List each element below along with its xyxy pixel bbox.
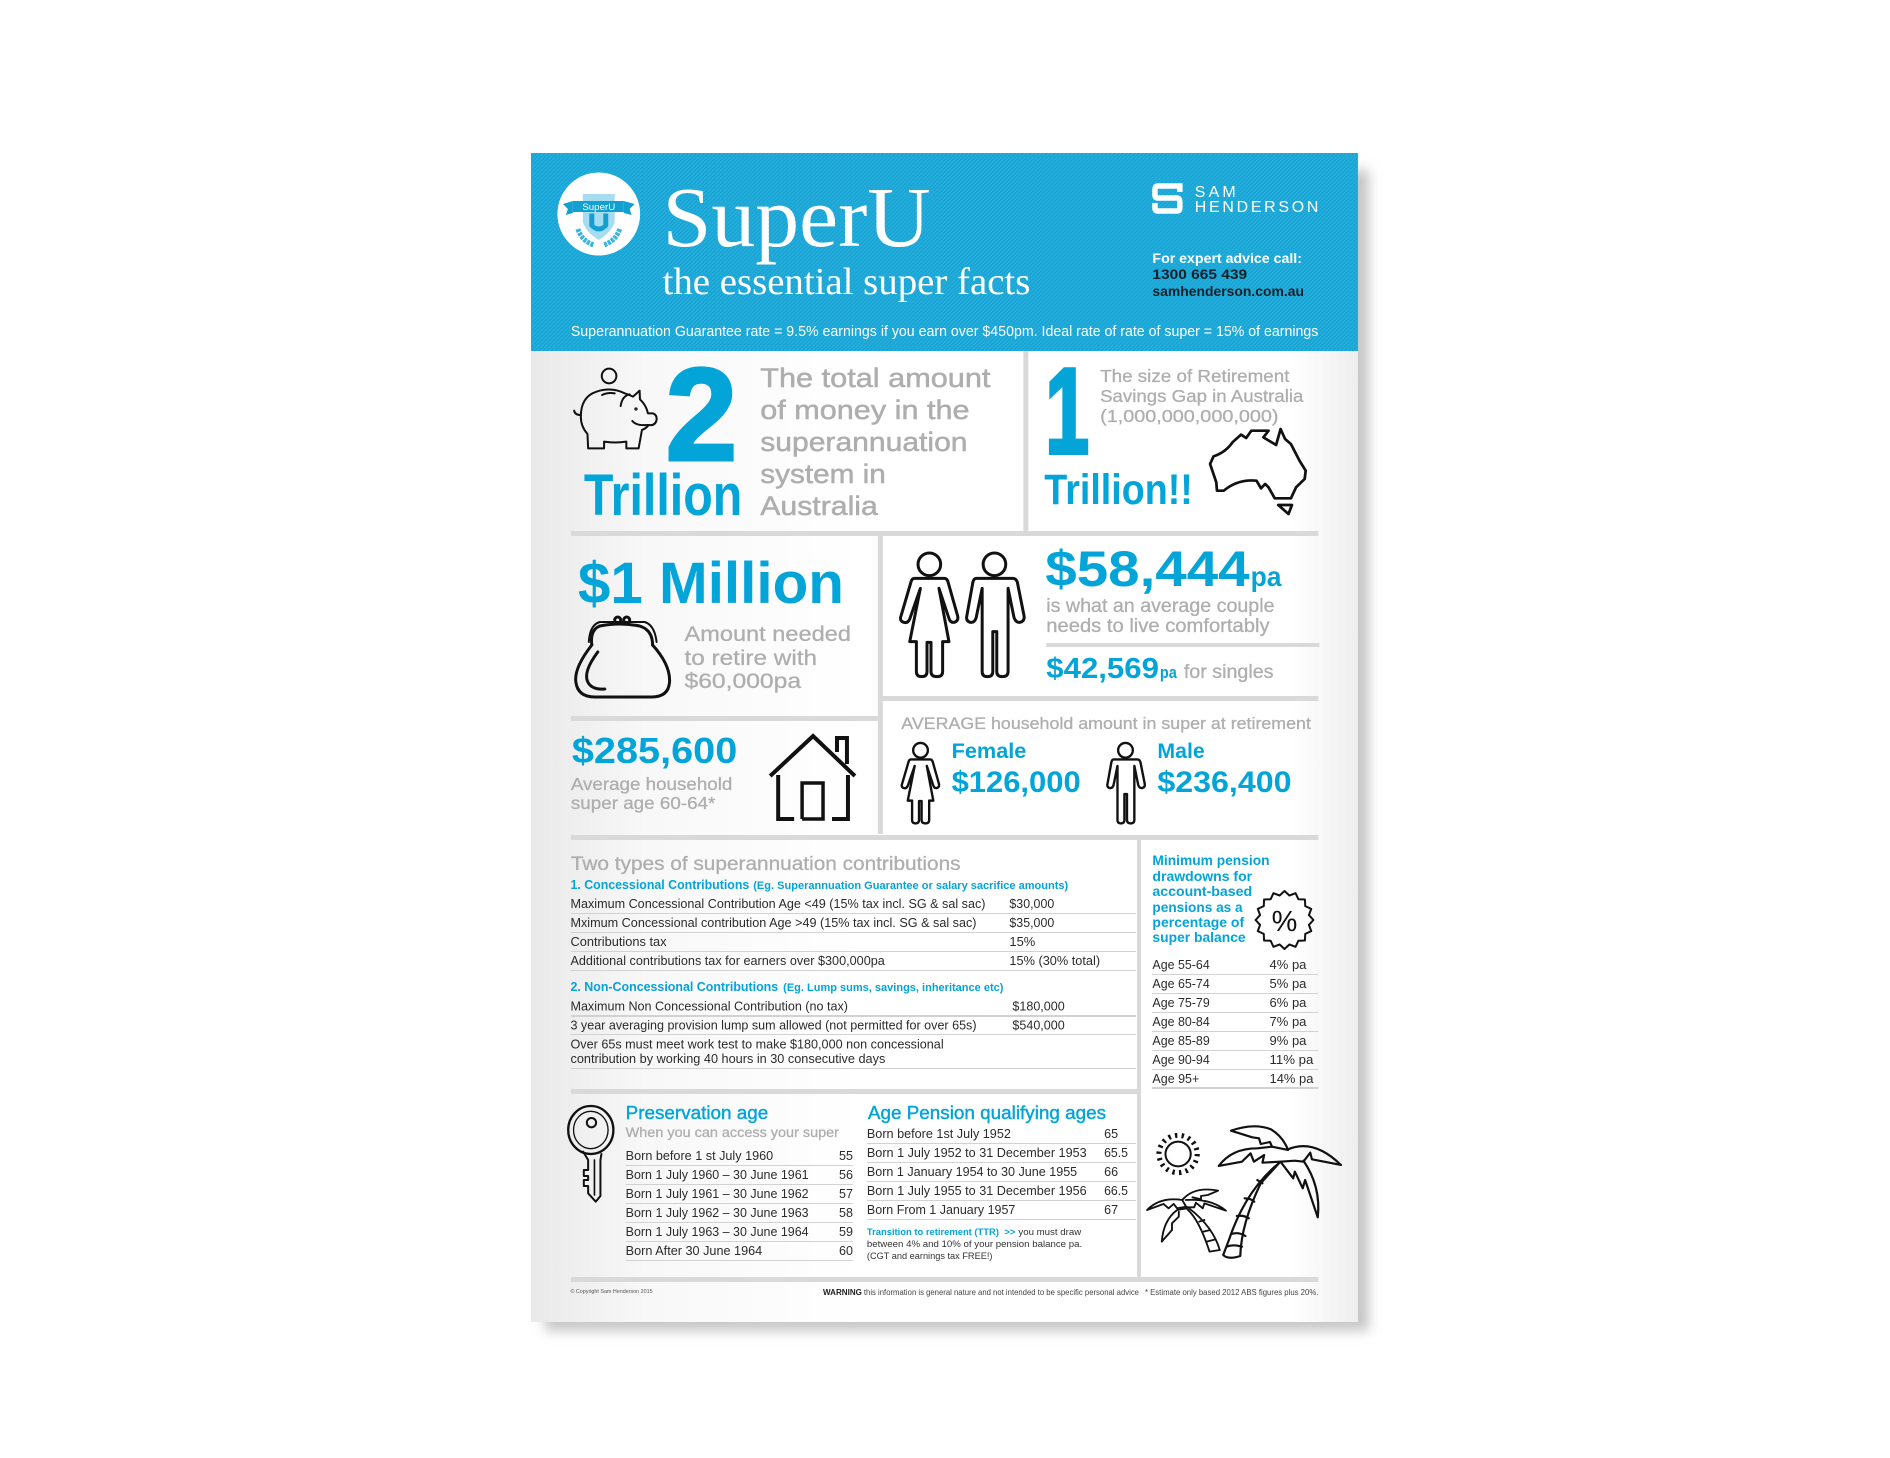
description: superannuation [760, 427, 968, 457]
Trillion label: Trillion [584, 464, 742, 528]
description: Savings Gap in Australia [1100, 386, 1303, 406]
panel: couple income [901, 541, 1282, 685]
drawdown table: Age 55-64 [1152, 958, 1210, 972]
preservation table: Born 1 July 1963 – 30 June 1964 [626, 1225, 809, 1239]
logo wreath [578, 229, 620, 245]
transition to retirement note: (CGT and earnings tax FREE!) [867, 1251, 992, 1262]
pension table: Born 1 July 1955 to 31 December 1956 [867, 1184, 1087, 1198]
drawdown table: Age 90-94 [1152, 1053, 1210, 1067]
description: The total amount [760, 363, 991, 393]
concessional table: $35,000 [1009, 916, 1054, 930]
drawdown table: Age 80-84 [1152, 1015, 1210, 1029]
description: Average household [571, 774, 732, 794]
drawdown table: 6% pa [1270, 996, 1306, 1010]
icon: male [1107, 743, 1145, 823]
footer [570, 1288, 1318, 1297]
guarantee rate line: Superannuation Guarantee rate = 9.5% earnings if you earn over $450pm. Ideal rate of rate of super = 15% of earnings [571, 324, 1318, 340]
icon: S mark [1155, 186, 1180, 211]
pension table: 65 [1104, 1127, 1118, 1141]
icon: percent badge [1256, 891, 1313, 949]
heading: Age Pension qualifying ages [868, 1102, 1106, 1123]
description [760, 363, 991, 521]
poster [531, 153, 1369, 1331]
description: Amount needed [684, 622, 851, 646]
couple description [1046, 596, 1275, 637]
title: SuperU [663, 169, 931, 265]
preservation table: Born 1 July 1960 – 30 June 1961 [626, 1168, 809, 1182]
drawdown table [1152, 958, 1318, 1088]
logo name line 1: SAM [1195, 184, 1236, 201]
drawdown table: Age 95+ [1152, 1072, 1199, 1086]
description: super age 60-64* [571, 793, 715, 813]
non-concessional table [570, 999, 1136, 1068]
icon: key [568, 1106, 613, 1202]
heading: drawdowns for [1152, 869, 1253, 884]
female amount: $126,000 [952, 766, 1081, 799]
amount: $285,600 [572, 730, 737, 771]
pension table: Born before 1st July 1952 [867, 1127, 1011, 1141]
concessional table: Maximum Concessional Contribution Age <49 (15% tax incl. SG & sal sac) [570, 897, 985, 911]
panel: 2 trillion [574, 341, 991, 528]
transition to retirement note: you must draw [1018, 1227, 1081, 1238]
panel: age pension qualifying ages [867, 1102, 1136, 1262]
singles label: for singles [1184, 662, 1274, 683]
preservation table: Born before 1 st July 1960 [626, 1149, 773, 1163]
concessional table: Mximum Concessional contribution Age >49 (15% tax incl. SG & sal sac) [570, 916, 977, 930]
preservation table: Born 1 July 1962 – 30 June 1963 [626, 1206, 809, 1220]
icon: sun [1159, 1135, 1197, 1173]
preservation table: Born After 30 June 1964 [626, 1244, 762, 1258]
singles suffix: pa [1160, 663, 1177, 682]
heading [1152, 853, 1270, 945]
panel: 1 million [576, 552, 851, 697]
poster sheet [531, 153, 1358, 1322]
description [1100, 366, 1303, 426]
pension table: 66.5 [1104, 1184, 1128, 1198]
icon: small palm [1147, 1189, 1226, 1252]
contact heading: For expert advice call: [1152, 251, 1302, 266]
concessional table: Additional contributions tax for earners over $300,000pa [570, 954, 885, 968]
concessional table: 15% (30% total) [1009, 954, 1100, 968]
pension table: Born 1 January 1954 to 30 June 1955 [867, 1165, 1077, 1179]
non-concessional table: 3 year averaging provision lump sum allowed (not permitted for over 65s) [570, 1018, 977, 1033]
description: The size of Retirement [1100, 366, 1289, 386]
non-concessional table: Over 65s must meet work test to make $180,000 non concessional [570, 1037, 944, 1052]
preservation table [626, 1149, 853, 1260]
drawdown table: 4% pa [1270, 958, 1306, 972]
icon: percent badge: % [1272, 906, 1297, 938]
drawdown table: Age 65-74 [1152, 977, 1210, 991]
icon: sun and palm trees [1147, 1126, 1341, 1258]
drawdown table: 7% pa [1270, 1015, 1306, 1029]
pension table [867, 1127, 1136, 1220]
non-concessional heading [570, 979, 1004, 994]
heading: pensions as a [1152, 900, 1243, 915]
description: system in [760, 459, 886, 489]
panel: preservation age [568, 1102, 853, 1260]
panel: average by gender [901, 714, 1311, 823]
per annum suffix: pa [1251, 561, 1282, 592]
singles amount: $42,569 [1046, 653, 1159, 685]
couple amount: $58,444 [1045, 541, 1250, 597]
preservation table: 57 [839, 1187, 853, 1201]
couple description: is what an average couple [1046, 596, 1275, 617]
non-concessional table: Maximum Non Concessional Contribution (no tax) [570, 999, 848, 1014]
transition to retirement note: Transition to retirement (TTR) [867, 1227, 999, 1238]
Sam Henderson logo [1155, 184, 1318, 216]
heading: Two types of superannuation contributions [571, 853, 961, 875]
panel: household super [571, 730, 855, 819]
icon: female [902, 743, 939, 823]
logo wordmark: SuperU [582, 202, 615, 213]
subheading: When you can access your super [626, 1124, 839, 1140]
description [571, 774, 732, 813]
website: samhenderson.com.au [1152, 284, 1304, 299]
description: to retire with [684, 646, 817, 670]
heading: Preservation age [626, 1102, 768, 1123]
concessional heading: 1. Concessional Contributions [570, 877, 749, 892]
preservation table: 55 [839, 1149, 853, 1163]
big number 2: 2 [666, 341, 737, 488]
preservation table: 56 [839, 1168, 853, 1182]
icon: Australia map [1210, 429, 1306, 514]
panel: 1 trillion [1044, 343, 1306, 514]
concessional table [570, 897, 1136, 970]
pension table: Born 1 July 1952 to 31 December 1953 [867, 1146, 1087, 1160]
pension table: 67 [1104, 1203, 1118, 1217]
preservation table: 60 [839, 1244, 853, 1258]
panel: contributions [570, 853, 1136, 1068]
concessional table: $30,000 [1009, 897, 1054, 911]
header band [531, 153, 1358, 351]
concessional table: 15% [1009, 935, 1035, 949]
drawdown table: 14% pa [1270, 1072, 1313, 1086]
pension table: 65.5 [1104, 1146, 1128, 1160]
female label: Female [952, 739, 1026, 763]
subtitle: the essential super facts [663, 261, 1030, 303]
non-concessional heading: (Eg. Lump sums, savings, inheritance etc) [783, 982, 1004, 994]
drawdown table: Age 75-79 [1152, 996, 1210, 1010]
concessional heading: (Eg. Superannuation Guarantee or salary sacrifice amounts) [753, 880, 1069, 892]
logo name line 2: HENDERSON [1195, 199, 1318, 216]
heading: super balance [1152, 930, 1246, 945]
male label: Male [1157, 739, 1205, 763]
heading: AVERAGE household amount in super at retirement [901, 714, 1311, 733]
transition to retirement note [867, 1227, 1082, 1262]
drawdown table: Age 85-89 [1152, 1034, 1210, 1048]
concessional heading [570, 877, 1069, 892]
drawdown table: 11% pa [1270, 1053, 1313, 1067]
drawdown table: 5% pa [1270, 977, 1306, 991]
poster shadow [545, 170, 1369, 1331]
non-concessional table: $180,000 [1012, 999, 1065, 1014]
transition to retirement note: >> [1004, 1227, 1016, 1238]
preservation table: 59 [839, 1225, 853, 1239]
heading: Minimum pension [1152, 853, 1270, 868]
concessional table: Contributions tax [570, 935, 667, 949]
drawdown table: 9% pa [1270, 1034, 1306, 1048]
estimate note: * Estimate only based 2012 ABS figures plus 20%. [1145, 1288, 1318, 1297]
icon: couple [901, 553, 1024, 677]
contact details [1152, 251, 1304, 299]
male amount: $236,400 [1157, 766, 1291, 799]
preservation table: 58 [839, 1206, 853, 1220]
warning label: WARNING [823, 1288, 862, 1297]
phone number: 1300 665 439 [1152, 267, 1247, 282]
icon: house [770, 736, 855, 819]
big number 1: 1 [1045, 343, 1089, 479]
logo badge [557, 172, 640, 256]
non-concessional table: contribution by working 40 hours in 30 consecutive days [570, 1052, 885, 1066]
preservation table: Born 1 July 1961 – 30 June 1962 [626, 1187, 809, 1201]
couple description: needs to live comfortably [1046, 616, 1270, 637]
description: of money in the [760, 395, 970, 425]
non-concessional heading: 2. Non-Concessional Contributions [570, 979, 778, 994]
description [684, 622, 851, 693]
warning text: this information is general nature and not intended to be specific personal advice [864, 1288, 1140, 1297]
description: Australia [760, 491, 878, 521]
transition to retirement note: between 4% and 10% of your pension balance pa. [867, 1239, 1082, 1250]
icon: piggy bank [574, 369, 657, 448]
non-concessional table: $540,000 [1012, 1018, 1065, 1033]
pension table: 66 [1104, 1165, 1118, 1179]
icon: large palm [1219, 1126, 1341, 1258]
icon: purse [576, 617, 670, 697]
pension table: Born From 1 January 1957 [867, 1203, 1015, 1217]
heading: percentage of [1152, 915, 1245, 930]
heading: account-based [1152, 884, 1252, 899]
description: $60,000pa [684, 669, 801, 693]
Trillion!! label: Trillion!! [1044, 466, 1193, 514]
panel separators [571, 351, 1319, 1282]
description: (1,000,000,000,000) [1100, 406, 1279, 426]
copyright: © Copyright Sam Henderson 2015 [570, 1288, 653, 1295]
headline: $1 Million [578, 552, 844, 616]
panel: minimum pension drawdowns [1152, 853, 1318, 1088]
